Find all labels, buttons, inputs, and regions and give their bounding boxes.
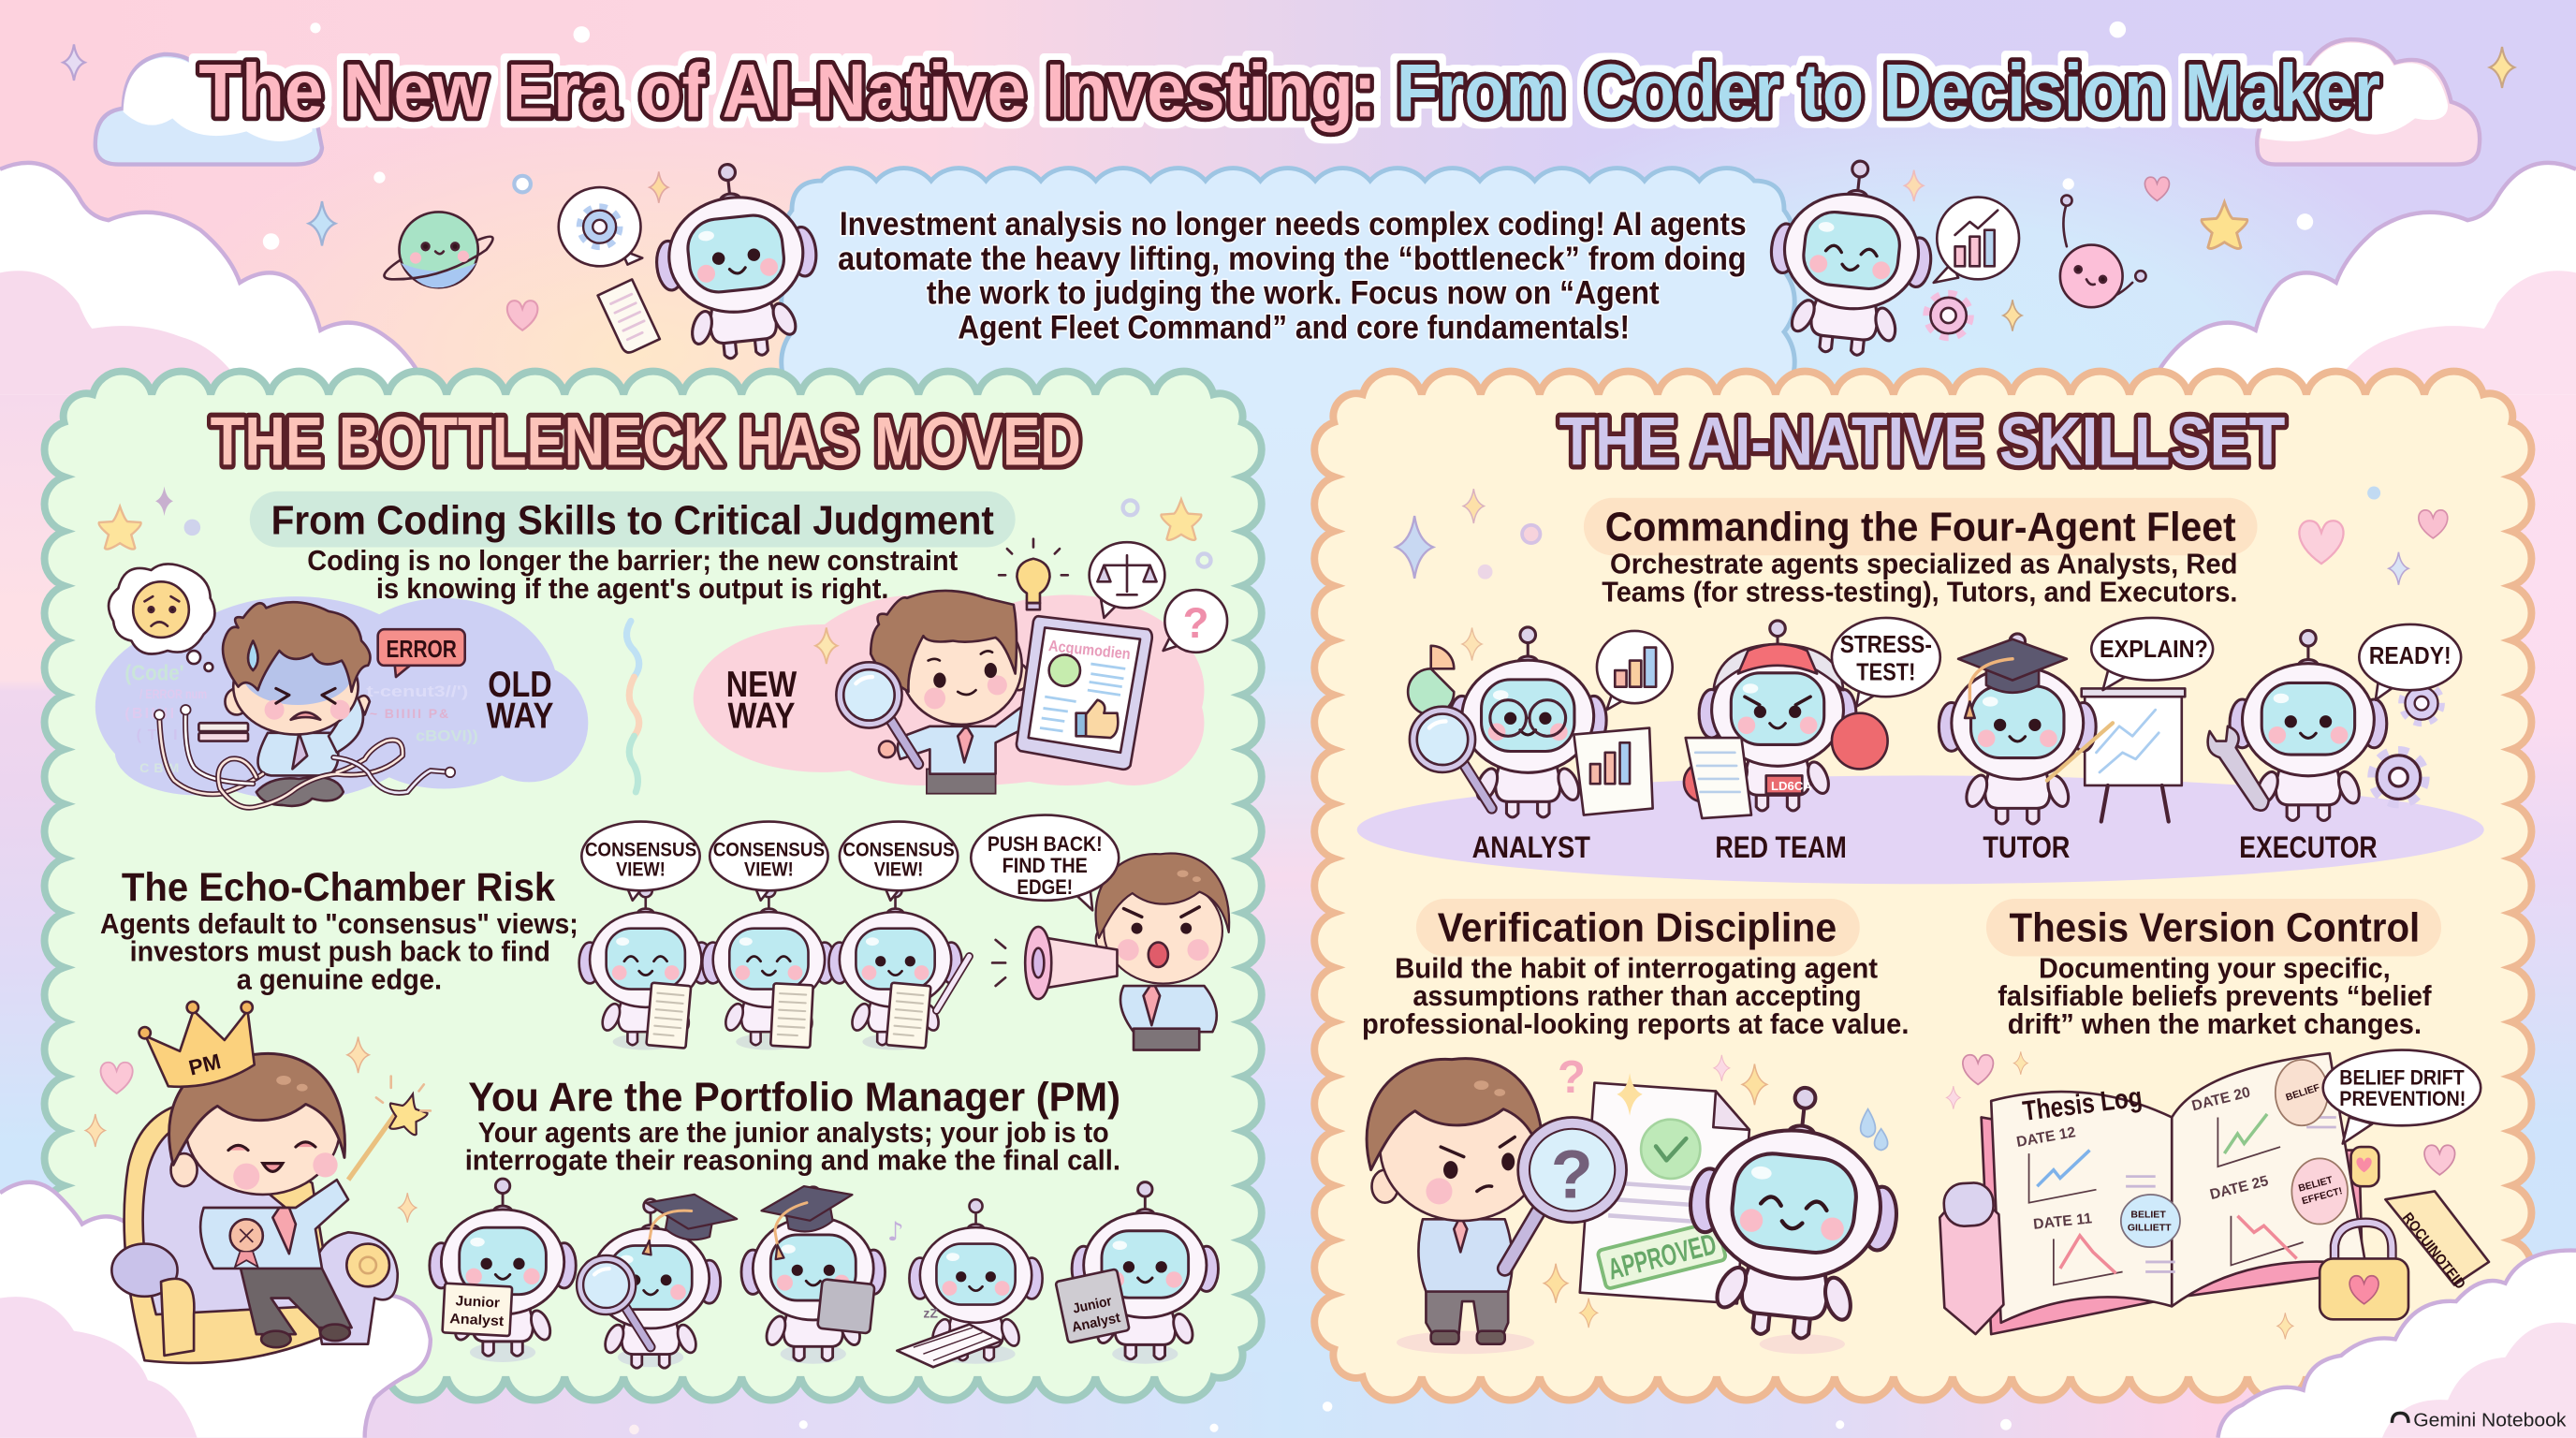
body: four-agent fleet: Orchestrate agents specialized as Analysts, Red	[1610, 548, 2237, 580]
speech bubbles: consensus view	[581, 822, 958, 901]
panel: the AI-native skillset	[1314, 372, 2531, 1400]
icon: gear speech bubble	[559, 187, 642, 266]
subheading: critical judgment: From Coding Skills to Critical Judgment	[271, 497, 994, 543]
robot: junior analyst with sign	[430, 1179, 576, 1362]
label: old way: WAY	[487, 697, 554, 737]
robot: typing on keyboard: ♪	[887, 1216, 904, 1247]
illustration: old way blob	[95, 596, 588, 800]
agent: red team: LD6CA	[1771, 779, 1812, 793]
decorative shapes left panel	[99, 487, 1211, 567]
speech bubble: push back	[971, 815, 1119, 910]
icon: pink alien	[2060, 196, 2146, 307]
icon: tablet	[1017, 616, 1152, 770]
speech bubble: push back: PUSH BACK!	[988, 832, 1103, 856]
body: echo-chamber risk: a genuine edge.	[237, 963, 442, 996]
mini bubbles: belief notes	[2121, 1060, 2348, 1247]
illustration: thesis log book	[1982, 1053, 2365, 1334]
speech bubbles: consensus view: CONSENSUS	[713, 839, 825, 860]
intro panel: Agent Fleet Command” and core fundamentals!	[958, 310, 1630, 346]
robot: junior analyst with sign: Analyst	[449, 1312, 505, 1329]
speech bubble: ready	[2359, 624, 2461, 700]
body: thesis version control	[1998, 951, 2432, 1040]
robot: analyst with calculator	[1056, 1182, 1218, 1364]
robot: graduate with magnifier	[577, 1186, 739, 1368]
body: echo-chamber risk: Agents default to "consensus" views;	[100, 907, 578, 940]
title: The New Era of AI-Native Investing:	[198, 50, 1377, 134]
agent: analyst	[1408, 627, 1673, 817]
faded code text	[124, 661, 478, 775]
decorative wave divider	[626, 621, 639, 792]
body: thesis version control: Documenting your specific,	[2039, 951, 2391, 984]
icon: scroll	[598, 279, 660, 355]
mini bubbles: belief notes: BELIET	[2297, 1174, 2334, 1195]
body: verification discipline: assumptions rather than accepting	[1412, 979, 1862, 1012]
body: thesis version control: drift” when the market changes.	[2008, 1007, 2422, 1040]
mini bubbles: belief notes: GILLIETT	[2128, 1223, 2172, 1234]
panel heading: THE BOTTLENECK HAS MOVED	[211, 403, 1081, 480]
body: portfolio manager: interrogate their reasoning and make the final call.	[465, 1144, 1120, 1177]
subheading pill	[250, 492, 1016, 547]
robot: junior analyst with sign: Junior	[455, 1294, 501, 1312]
robot: analyst with calculator: Analyst	[1071, 1311, 1121, 1336]
speech bubble: stress-test	[1832, 618, 1940, 707]
speech bubble: ready: READY!	[2369, 643, 2452, 669]
label: new way: NEW	[726, 665, 798, 705]
faded code text: (Code'	[124, 661, 184, 685]
intro panel: Investment analysis no longer needs complex coding! AI agents	[840, 206, 1747, 242]
title	[198, 50, 2380, 134]
agent labels: ANALYST	[1472, 830, 1590, 864]
icon: magnifier with question mark	[1505, 1117, 1627, 1269]
speech bubble: belief drift prevention: BELIEF DRIFT	[2339, 1065, 2465, 1089]
speech bubble: stress-test: TEST!	[1856, 658, 1915, 686]
faded code text: (BIIIII	[124, 706, 174, 722]
body: thesis version control: falsifiable beliefs prevents “belief	[1998, 979, 2432, 1012]
icon: approved document: APPROVED	[1604, 1226, 1720, 1286]
icon: scales speech bubble	[1090, 542, 1164, 618]
icon: PM crown	[135, 988, 268, 1097]
agent labels	[1472, 830, 2378, 864]
body: critical judgment: Coding is no longer the barrier; the new constraint	[307, 544, 958, 577]
agent: tutor	[1939, 634, 2185, 824]
speech bubbles: consensus view: CONSENSUS	[842, 839, 955, 860]
robot: verification helper	[1677, 1078, 1909, 1347]
cloud: lower right	[2217, 1251, 2576, 1438]
intro panel: the work to judging the work. Focus now on “Agent	[927, 275, 1660, 312]
speech bubbles: consensus view: VIEW!	[874, 858, 923, 880]
label: new way	[726, 665, 798, 737]
faded code text: CBM	[139, 760, 179, 775]
robot: analyst with calculator: Junior	[1072, 1294, 1113, 1317]
body: critical judgment: is knowing if the agent's output is right.	[376, 572, 889, 605]
label: new way: WAY	[728, 697, 796, 737]
agent labels: TUTOR	[1983, 830, 2070, 864]
speech bubble: explain: EXPLAIN?	[2100, 637, 2208, 663]
icon: small gear	[1927, 295, 1969, 336]
decorative sparkles verification	[1544, 1052, 1767, 1328]
illustration: thesis log book: Thesis Log	[2021, 1082, 2144, 1127]
icon: padlock and tag	[2320, 1147, 2489, 1319]
agent: red team	[1684, 621, 1888, 818]
icon: planet	[384, 212, 493, 287]
body: echo-chamber risk	[100, 907, 578, 996]
robot: upper right	[1762, 153, 1940, 361]
callout: error: ERROR	[386, 637, 457, 663]
icon: PM crown: PM	[186, 1049, 223, 1080]
intro panel: automate the heavy lifting, moving the “bottleneck” from doing	[838, 241, 1747, 277]
decorative shapes right panel	[1396, 487, 2448, 585]
panel: the bottleneck has moved	[45, 372, 1262, 1400]
icon: pen	[1938, 1181, 2005, 1336]
body: verification discipline: Build the habit of interrogating agent	[1395, 951, 1878, 984]
icon: question speech bubble	[1164, 590, 1227, 653]
intro panel	[782, 169, 1794, 403]
speech bubbles: consensus view: CONSENSUS	[585, 839, 696, 860]
cloud: lower left	[0, 1182, 431, 1438]
illustration: thought bubble sad face	[109, 564, 214, 671]
mini bubbles: belief notes: BELIET	[2130, 1210, 2166, 1221]
decorative hearts and sparkles PM	[85, 1036, 417, 1223]
illustration: new way blob	[694, 594, 1204, 785]
icon: padlock and tag: ROCUINOTEID	[2399, 1211, 2468, 1292]
icon: magnifier with question mark: ?	[1551, 1135, 1593, 1212]
speech bubbles: consensus view: VIEW!	[616, 858, 666, 880]
icon: approved document	[1580, 1083, 1752, 1303]
illustration: stressed coder tangled in wires	[154, 602, 455, 808]
decorative sparkles verification: ?	[1558, 1052, 1586, 1103]
decorative hearts and sparkles thesis	[1946, 1051, 2455, 1339]
subheading: four-agent fleet: Commanding the Four-Agent Fleet	[1605, 504, 2236, 550]
body: four-agent fleet	[1602, 548, 2237, 608]
floor ellipse	[1357, 775, 2484, 884]
illustration: PM on throne with crown and wand	[111, 1053, 432, 1363]
illustration: verifying report	[1367, 1059, 1845, 1354]
panel heading: THE AI-NATIVE SKILLSET	[1559, 403, 2285, 480]
mini bubbles: belief notes: EFFECT!	[2301, 1185, 2344, 1207]
faded code text: cBOVI))	[416, 727, 478, 745]
callout: error	[378, 629, 465, 677]
body: verification discipline	[1362, 951, 1909, 1040]
faded code text: / ERROR num	[139, 686, 207, 701]
agent labels: RED TEAM	[1715, 830, 1847, 864]
robot: typing on keyboard: zZ	[923, 1306, 938, 1321]
speech bubble: explain	[2091, 618, 2213, 690]
speech bubbles: consensus view: VIEW!	[744, 858, 794, 880]
illustration: confident investor with magnifier	[815, 591, 1029, 794]
illustration: thesis log book: DATE 11	[2032, 1211, 2093, 1233]
heading: echo-chamber risk: The Echo-Chamber Risk	[122, 865, 555, 910]
body: critical judgment	[307, 544, 958, 605]
illustration: thesis log book: DATE 25	[2208, 1173, 2270, 1203]
illustration: thesis log book: DATE 12	[2015, 1124, 2077, 1151]
icon: chart speech bubble	[1934, 198, 2019, 283]
body: echo-chamber risk: investors must push back to find	[130, 935, 550, 968]
faded code text: (T I	[137, 727, 178, 743]
faded code text: ~ BIIIII P&	[370, 706, 448, 721]
heading block: thesis version control: Thesis Version Control	[2009, 905, 2420, 951]
robot: typing on keyboard	[887, 1199, 1043, 1367]
faded code text: t-cenut3//')	[366, 682, 468, 700]
icon: light bulb	[999, 539, 1068, 609]
icon: question speech bubble: ?	[1183, 599, 1209, 647]
title: From Coder to Decision Maker	[1397, 50, 2380, 134]
heading block: verification discipline: Verification Discipline	[1438, 905, 1837, 951]
robots: consensus group	[579, 884, 970, 1050]
illustration: investor with megaphone	[992, 854, 1229, 1050]
speech bubble: stress-test: STRESS-	[1840, 630, 1932, 658]
agent: executor	[2208, 630, 2440, 820]
icon: tablet: Acgumodien	[1047, 637, 1132, 663]
clouds: upper left and right	[0, 39, 2576, 394]
speech bubble: belief drift prevention: PREVENTION!	[2339, 1087, 2466, 1110]
illustration: thesis log book: DATE 20	[2190, 1084, 2252, 1114]
speech bubble: push back: FIND THE	[1003, 854, 1088, 877]
subheading pill	[1584, 498, 2258, 555]
label: old way: OLD	[488, 665, 552, 705]
label: old way	[487, 665, 554, 737]
speech bubble: belief drift prevention	[2323, 1050, 2481, 1144]
mini bubbles: belief notes: BELIEF	[2285, 1082, 2321, 1104]
watermark: Gemini Notebook	[2413, 1410, 2567, 1431]
body: four-agent fleet: Teams (for stress-testing), Tutors, and Executors.	[1602, 575, 2237, 608]
robot: graduate with tablet	[741, 1179, 886, 1364]
body: portfolio manager	[465, 1116, 1120, 1177]
body: verification discipline: professional-looking reports at face value.	[1362, 1007, 1909, 1040]
heading: portfolio manager: You Are the Portfolio Manager (PM)	[468, 1074, 1120, 1120]
agent labels: EXECUTOR	[2239, 830, 2378, 864]
robot: upper left	[647, 156, 827, 365]
body: portfolio manager: Your agents are the junior analysts; your job is to	[478, 1116, 1109, 1149]
speech bubble: push back: EDGE!	[1017, 875, 1073, 899]
